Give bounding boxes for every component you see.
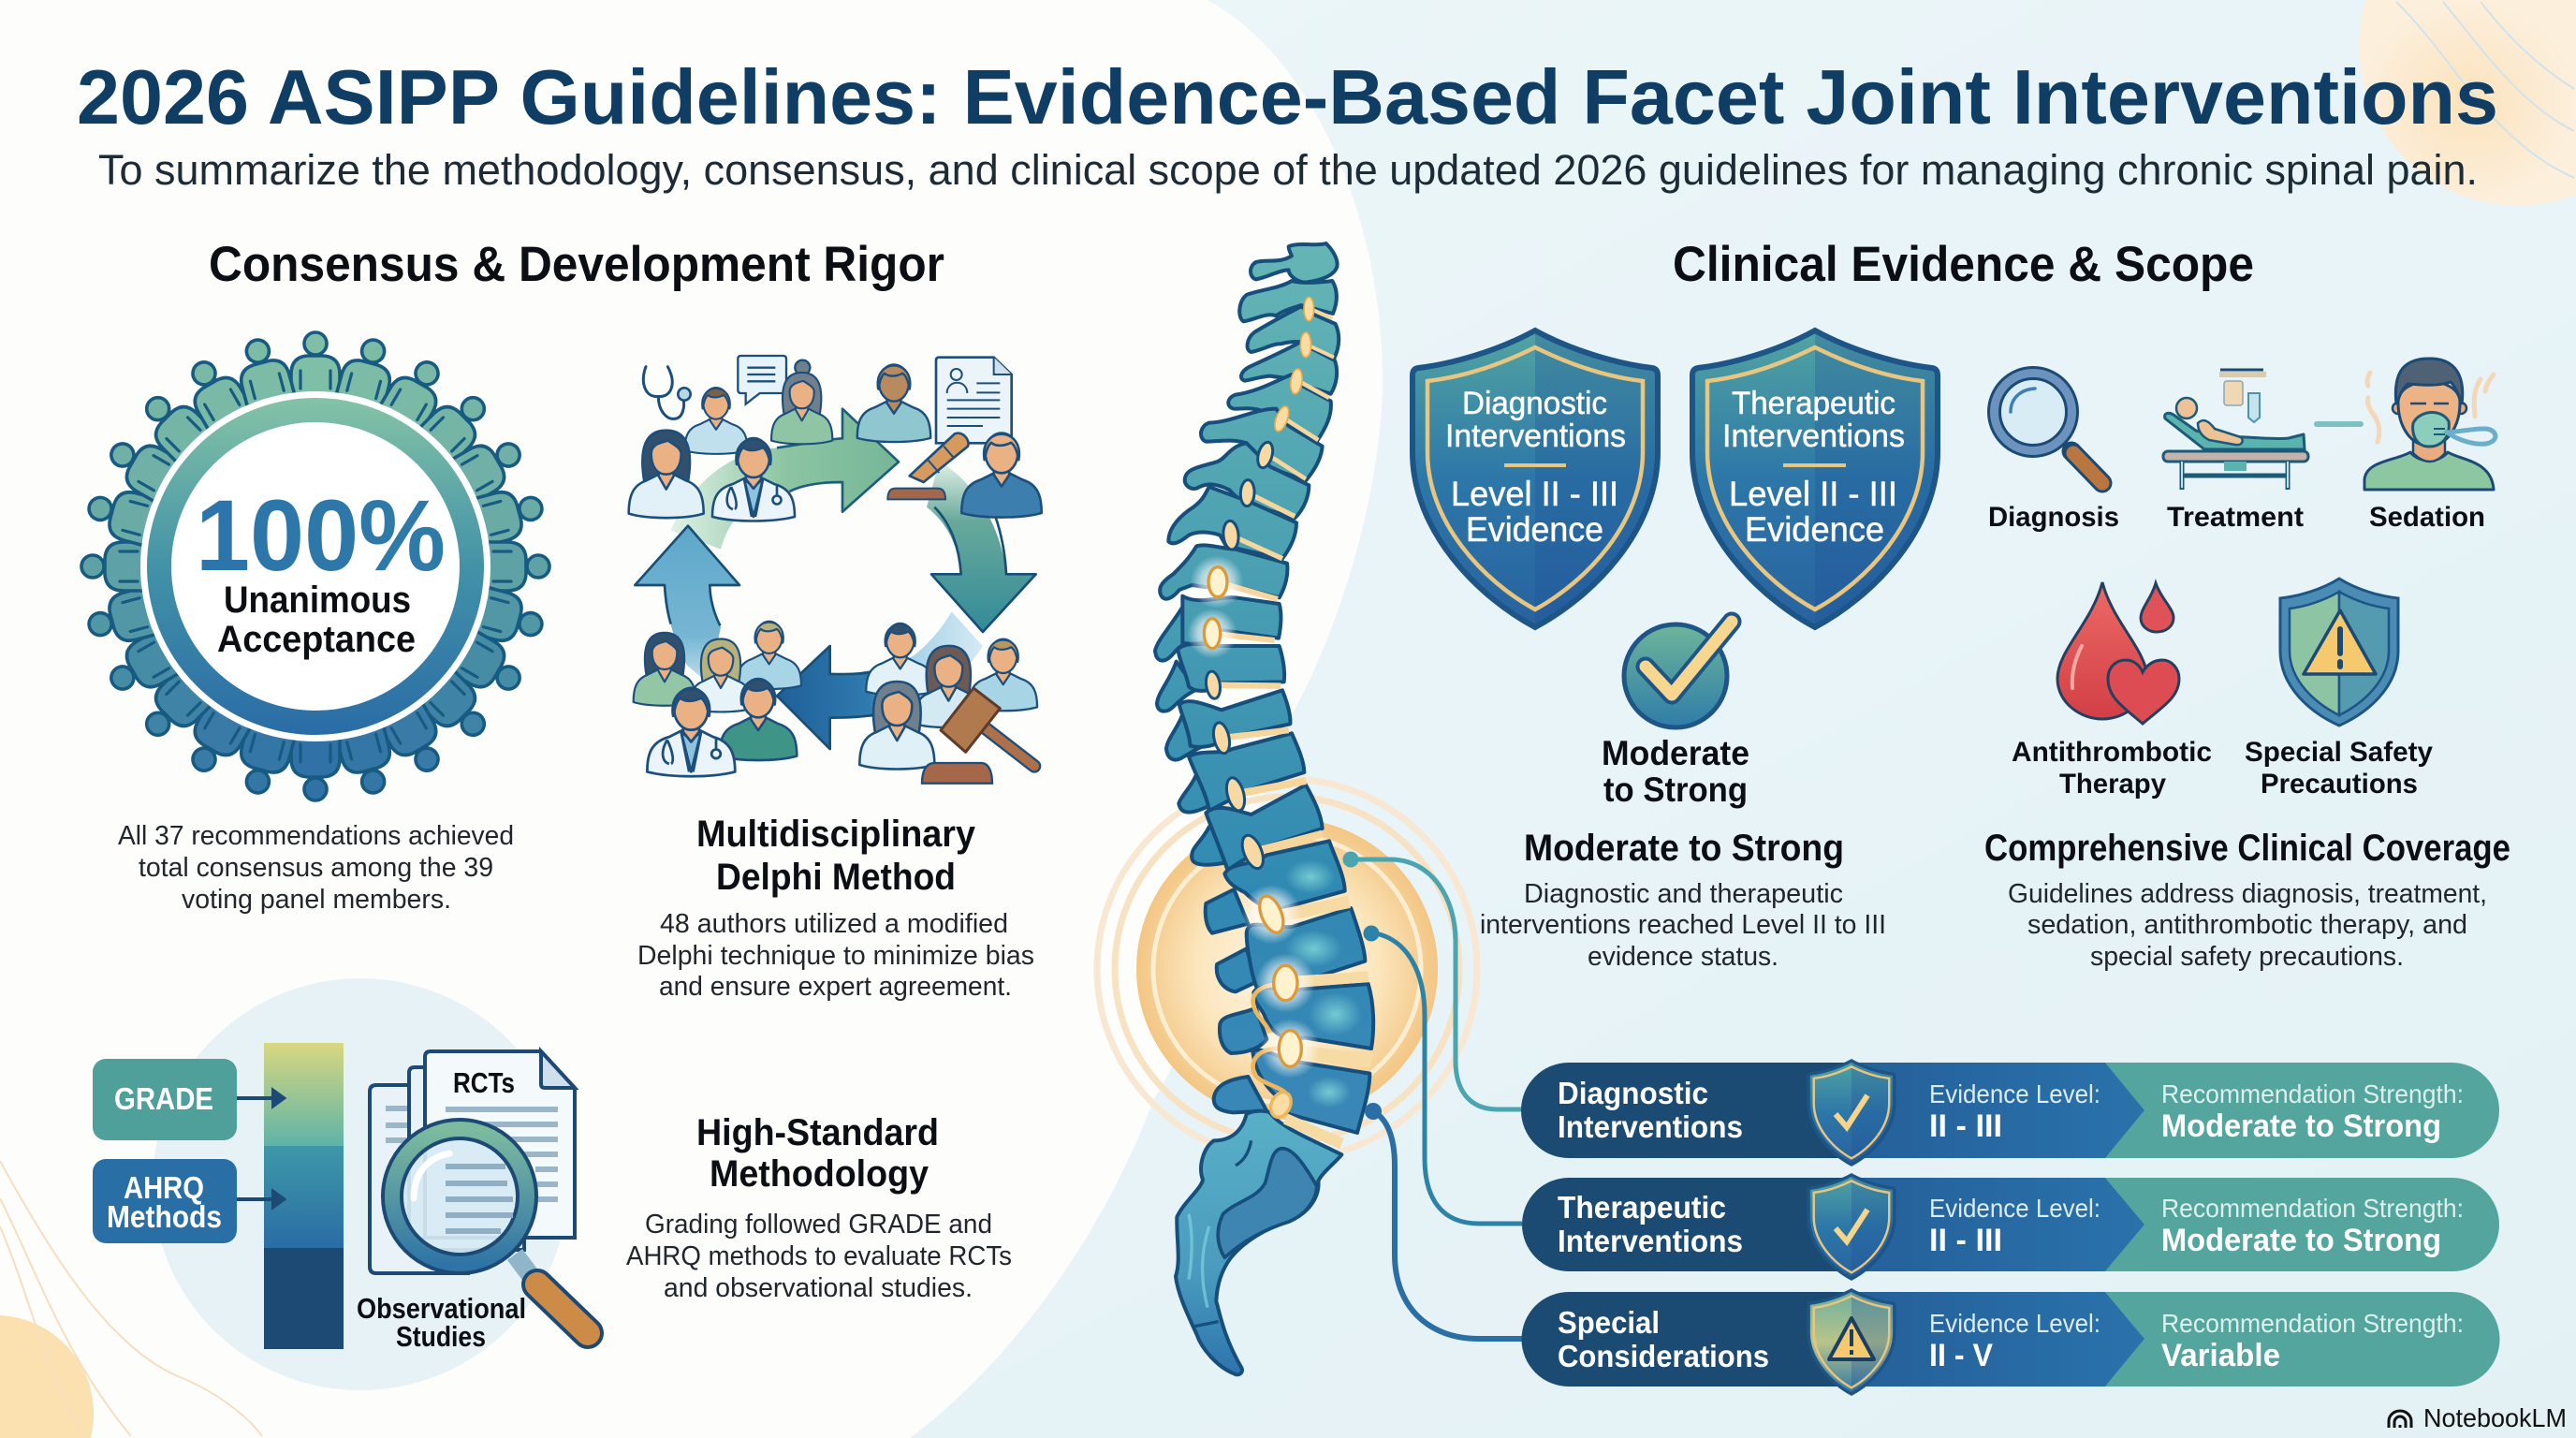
shield: diagnostic interventions: Diagnostic bbox=[1462, 386, 1607, 421]
label: unanimous acceptance: Unanimous bbox=[224, 580, 411, 621]
description bbox=[626, 1210, 1012, 1303]
label: observational studies bbox=[357, 1292, 526, 1353]
connector dash bbox=[2314, 421, 2364, 427]
text: moderate to strong summary: evidence status. bbox=[1588, 942, 1778, 972]
pill: special considerations bbox=[1522, 1290, 2499, 1394]
labels: antithrombotic and safety: Antithrombotic bbox=[2012, 737, 2212, 768]
pill: diagnostic interventions: Interventions bbox=[1558, 1109, 1743, 1144]
icon: stethoscope bbox=[643, 367, 684, 418]
pill: diagnostic interventions: Evidence Level: bbox=[1929, 1079, 2100, 1108]
spine illustration bbox=[1155, 243, 1373, 1374]
arrow: teal bbox=[927, 462, 1036, 632]
box: AHRQ methods: Methods bbox=[107, 1199, 222, 1234]
label: moderate to strong: Moderate bbox=[1602, 734, 1749, 772]
ring of panel members bbox=[81, 332, 549, 800]
pill: special considerations: Evidence Level: bbox=[1929, 1309, 2100, 1338]
heading bbox=[696, 1112, 939, 1195]
text: moderate to strong summary: interventions reached Level II to III bbox=[1480, 910, 1886, 940]
description: AHRQ methods to evaluate RCTs bbox=[626, 1241, 1012, 1271]
description: 48 authors utilized a modified bbox=[660, 909, 1008, 939]
sacrum and coccyx bbox=[1176, 1111, 1341, 1374]
panel: methodology illustration bbox=[93, 1043, 588, 1353]
description: and ensure expert agreement. bbox=[659, 972, 1012, 1002]
labels: diagnosis treatment sedation: Treatment bbox=[2167, 502, 2304, 533]
shield: therapeutic interventions: Interventions bbox=[1722, 418, 1905, 454]
text: high-standard methodology bbox=[626, 1112, 1012, 1303]
text: consensus description: total consensus among the 39 bbox=[139, 853, 493, 883]
text: consensus description: voting panel members. bbox=[182, 885, 451, 915]
shield: diagnostic interventions: Interventions bbox=[1445, 418, 1626, 454]
shield: diagnostic interventions bbox=[1412, 330, 1658, 627]
icon: blood drops and heart bbox=[2057, 582, 2179, 724]
aqua highlights in lumbar bodies bbox=[1285, 859, 1362, 1108]
shield: diagnostic interventions: Evidence bbox=[1466, 510, 1603, 549]
pill: special considerations: Variable bbox=[2161, 1338, 2280, 1373]
heading: Multidisciplinary bbox=[696, 814, 976, 855]
label: unanimous acceptance bbox=[217, 580, 416, 660]
text: comprehensive clinical coverage bbox=[1984, 828, 2510, 972]
pill: special considerations: II - V bbox=[1929, 1338, 1993, 1373]
label: unanimous acceptance: Acceptance bbox=[217, 619, 416, 660]
icon: stethoscope chest piece bbox=[678, 388, 691, 401]
box: AHRQ methods: AHRQ bbox=[124, 1170, 204, 1205]
box: AHRQ methods bbox=[93, 1159, 237, 1243]
people group: bottom right bbox=[859, 624, 1037, 769]
lumbar glow bbox=[1097, 779, 1477, 1159]
heading: consensus and development rigor: Consensus & Development Rigor bbox=[209, 237, 944, 292]
pill: therapeutic interventions: Moderate to Strong bbox=[2161, 1223, 2441, 1258]
shield: therapeutic interventions: Level II - III bbox=[1729, 475, 1897, 513]
evidence bar bbox=[264, 1043, 344, 1349]
pill: therapeutic interventions: Interventions bbox=[1558, 1224, 1743, 1258]
box: GRADE bbox=[93, 1059, 237, 1140]
text: comprehensive clinical coverage: sedation, antithrombotic therapy, and bbox=[2027, 910, 2467, 940]
arrow: dark blue bbox=[777, 611, 983, 749]
upper vertebrae bbox=[1160, 243, 1339, 599]
text: comprehensive clinical coverage: special safety precautions. bbox=[2090, 942, 2404, 972]
pill: special considerations: Special bbox=[1558, 1305, 1660, 1340]
facet joint halos bbox=[1187, 555, 1320, 1078]
documents: RCTs bbox=[370, 1051, 575, 1273]
heading: clinical evidence and scope: Clinical Evidence & Scope bbox=[1673, 237, 2254, 292]
pill: special considerations: Considerations bbox=[1558, 1339, 1769, 1373]
lower vertebrae bbox=[1155, 596, 1373, 1133]
heading: Delphi Method bbox=[716, 857, 956, 898]
description bbox=[637, 909, 1034, 1002]
shield: diagnostic interventions: Level II - III bbox=[1451, 475, 1618, 513]
title: 2026 ASIPP Guidelines: Evidence-Based Facet Joint Interventions bbox=[77, 53, 2498, 140]
label: observational studies: Studies bbox=[396, 1320, 486, 1353]
box: GRADE: GRADE bbox=[114, 1081, 213, 1116]
description: Grading followed GRADE and bbox=[645, 1210, 992, 1240]
subtitle: To summarize the methodology, consensus, and clinical scope of the updated 2026 guidelines for managing chronic spinal pain. bbox=[98, 146, 2478, 194]
description: and observational studies. bbox=[664, 1273, 973, 1303]
documents: RCTs: RCTs bbox=[453, 1066, 515, 1099]
pill: therapeutic interventions: II - III bbox=[1929, 1223, 2002, 1258]
pill: diagnostic interventions: Moderate to Strong bbox=[2161, 1108, 2441, 1144]
panel: Delphi cycle illustration bbox=[629, 356, 1042, 784]
stat: 100%: 100% bbox=[196, 478, 446, 592]
icon: document bbox=[936, 358, 1012, 443]
icon: writing pen bbox=[887, 433, 969, 499]
arrow: GRADE to bar bbox=[237, 1091, 284, 1106]
arrow: AHRQ to bar bbox=[237, 1192, 284, 1207]
connector: diagnostic bbox=[1345, 854, 1522, 1109]
text: moderate to strong summary bbox=[1480, 828, 1886, 972]
pill: special considerations: Recommendation Strength: bbox=[2161, 1309, 2464, 1338]
icon: safety shield bbox=[2280, 579, 2398, 726]
heading bbox=[696, 814, 976, 898]
text: comprehensive clinical coverage: Comprehensive Clinical Coverage bbox=[1984, 828, 2510, 869]
labels: antithrombotic and safety bbox=[2012, 737, 2433, 800]
pill: therapeutic interventions: Recommendation Strength: bbox=[2161, 1194, 2464, 1223]
connector: therapeutic bbox=[1366, 928, 1522, 1224]
label: observational studies: Observational bbox=[357, 1292, 526, 1325]
panel: unanimous acceptance badge bbox=[81, 332, 549, 800]
icon: treatment bed bbox=[2163, 370, 2308, 490]
connector: special considerations bbox=[1368, 1106, 1522, 1339]
labels: antithrombotic and safety: Therapy bbox=[2059, 769, 2166, 800]
pill: diagnostic interventions: II - III bbox=[1929, 1108, 2002, 1144]
arrow: light blue bbox=[635, 526, 739, 683]
text: consensus description: All 37 recommendations achieved bbox=[118, 821, 514, 851]
curved capsule around lower facets bbox=[1253, 985, 1289, 1117]
icon: gavel bbox=[922, 688, 1034, 784]
people group: bottom left bbox=[634, 622, 801, 776]
label: moderate to strong bbox=[1602, 734, 1749, 809]
shield: therapeutic interventions: Therapeutic bbox=[1732, 386, 1895, 421]
pill: diagnostic interventions: Recommendation Strength: bbox=[2161, 1079, 2464, 1108]
icon: magnifying glass bbox=[383, 1120, 588, 1333]
labels: diagnosis treatment sedation: Diagnosis bbox=[1988, 502, 2119, 533]
text: multidisciplinary Delphi method bbox=[637, 814, 1034, 1002]
people group: top right bbox=[857, 364, 1042, 518]
people group: top left bbox=[629, 360, 832, 521]
icon: speech bubble bbox=[738, 356, 786, 404]
labels: antithrombotic and safety: Precautions bbox=[2261, 769, 2418, 800]
shield: therapeutic interventions: Evidence bbox=[1745, 510, 1884, 549]
description: Delphi technique to minimize bias bbox=[637, 941, 1034, 971]
labels: antithrombotic and safety: Special Safety bbox=[2245, 737, 2433, 768]
arrow: green bbox=[671, 409, 899, 550]
text: consensus description bbox=[118, 821, 514, 915]
text: moderate to strong summary: Moderate to Strong bbox=[1524, 828, 1844, 869]
intervertebral discs bbox=[1212, 309, 1371, 1144]
watermark: NotebookLM: NotebookLM bbox=[2423, 1403, 2567, 1432]
pill: diagnostic interventions bbox=[1521, 1061, 2499, 1165]
text: comprehensive clinical coverage: Guidelines address diagnosis, treatment, bbox=[2008, 879, 2487, 909]
heading: Methodology bbox=[710, 1153, 929, 1195]
pill: therapeutic interventions bbox=[1522, 1175, 2499, 1279]
facet joints bbox=[1204, 297, 1314, 1121]
icon: diagnosis magnifier bbox=[1994, 373, 2102, 483]
shield: therapeutic interventions bbox=[1692, 330, 1938, 627]
labels: diagnosis treatment sedation: Sedation bbox=[2369, 502, 2485, 533]
pill: therapeutic interventions: Therapeutic bbox=[1558, 1190, 1726, 1225]
pill: diagnostic interventions: Diagnostic bbox=[1558, 1076, 1708, 1110]
icon: sedation patient bbox=[2364, 359, 2496, 490]
pill: therapeutic interventions: Evidence Level: bbox=[1929, 1194, 2100, 1223]
text: moderate to strong summary: Diagnostic and therapeutic bbox=[1524, 879, 1843, 909]
heading: High-Standard bbox=[696, 1112, 939, 1153]
icon: check mark bbox=[1624, 622, 1732, 727]
labels: diagnosis treatment sedation bbox=[1988, 502, 2485, 533]
label: moderate to strong: to Strong bbox=[1603, 770, 1748, 809]
